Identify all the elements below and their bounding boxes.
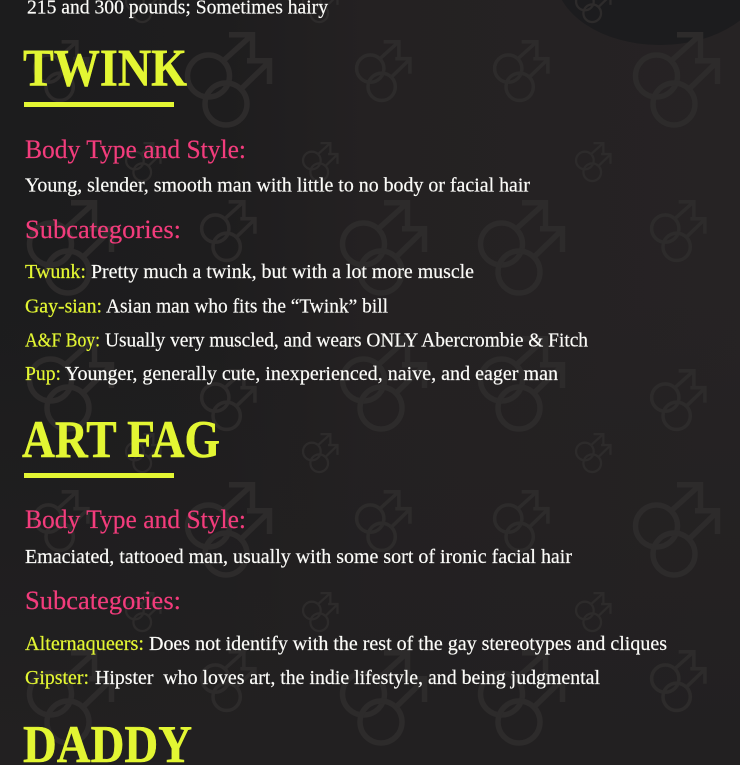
subcategory: twunk: Pretty much a twink, but with a lot more muscle <box>91 261 474 283</box>
text: art fag description: Emaciated, tattooed man, usually with some sort of ironic facial hair <box>25 546 572 568</box>
subcategory: twunk: Twunk: <box>25 261 86 283</box>
subcategory: a&f boy: Usually very muscled, and wears ONLY Abercrombie & Fitch <box>105 330 588 352</box>
subheading: subcategories: Subcategories: <box>25 214 181 244</box>
section: twink <box>23 40 588 385</box>
heading: twink: TWINK <box>23 40 187 98</box>
subheading: body type and style: Body Type and Style: <box>25 504 246 534</box>
subcategory: gay-sian: Asian man who fits the “Twink” bill <box>106 296 388 318</box>
subheading: subcategories: Subcategories: <box>25 585 181 615</box>
text: twink description: Young, slender, smooth man with little to no body or facial hair <box>25 174 530 196</box>
subcategory: pup: Pup: <box>25 363 61 385</box>
heading underline <box>24 102 174 107</box>
section: art fag <box>22 411 667 689</box>
subcategory: alternaqueers: Alternaqueers: <box>25 633 144 655</box>
subheading: body type and style: Body Type and Style: <box>25 134 246 164</box>
heading underline <box>24 473 174 478</box>
subcategory: gipster: Hipster who loves art, the indie lifestyle, and being judgmental <box>95 667 600 689</box>
subcategory: a&f boy: A&F Boy: <box>25 330 100 352</box>
subcategory: gipster: Gipster: <box>25 667 89 689</box>
heading: art fag: ART FAG <box>22 411 220 469</box>
subcategory: gay-sian: Gay-sian: <box>25 296 102 318</box>
subcategory: alternaqueers: Does not identify with the rest of the gay stereotypes and cliques <box>149 633 667 655</box>
subcategory: pup: Younger, generally cute, inexperienced, naive, and eager man <box>65 363 558 385</box>
